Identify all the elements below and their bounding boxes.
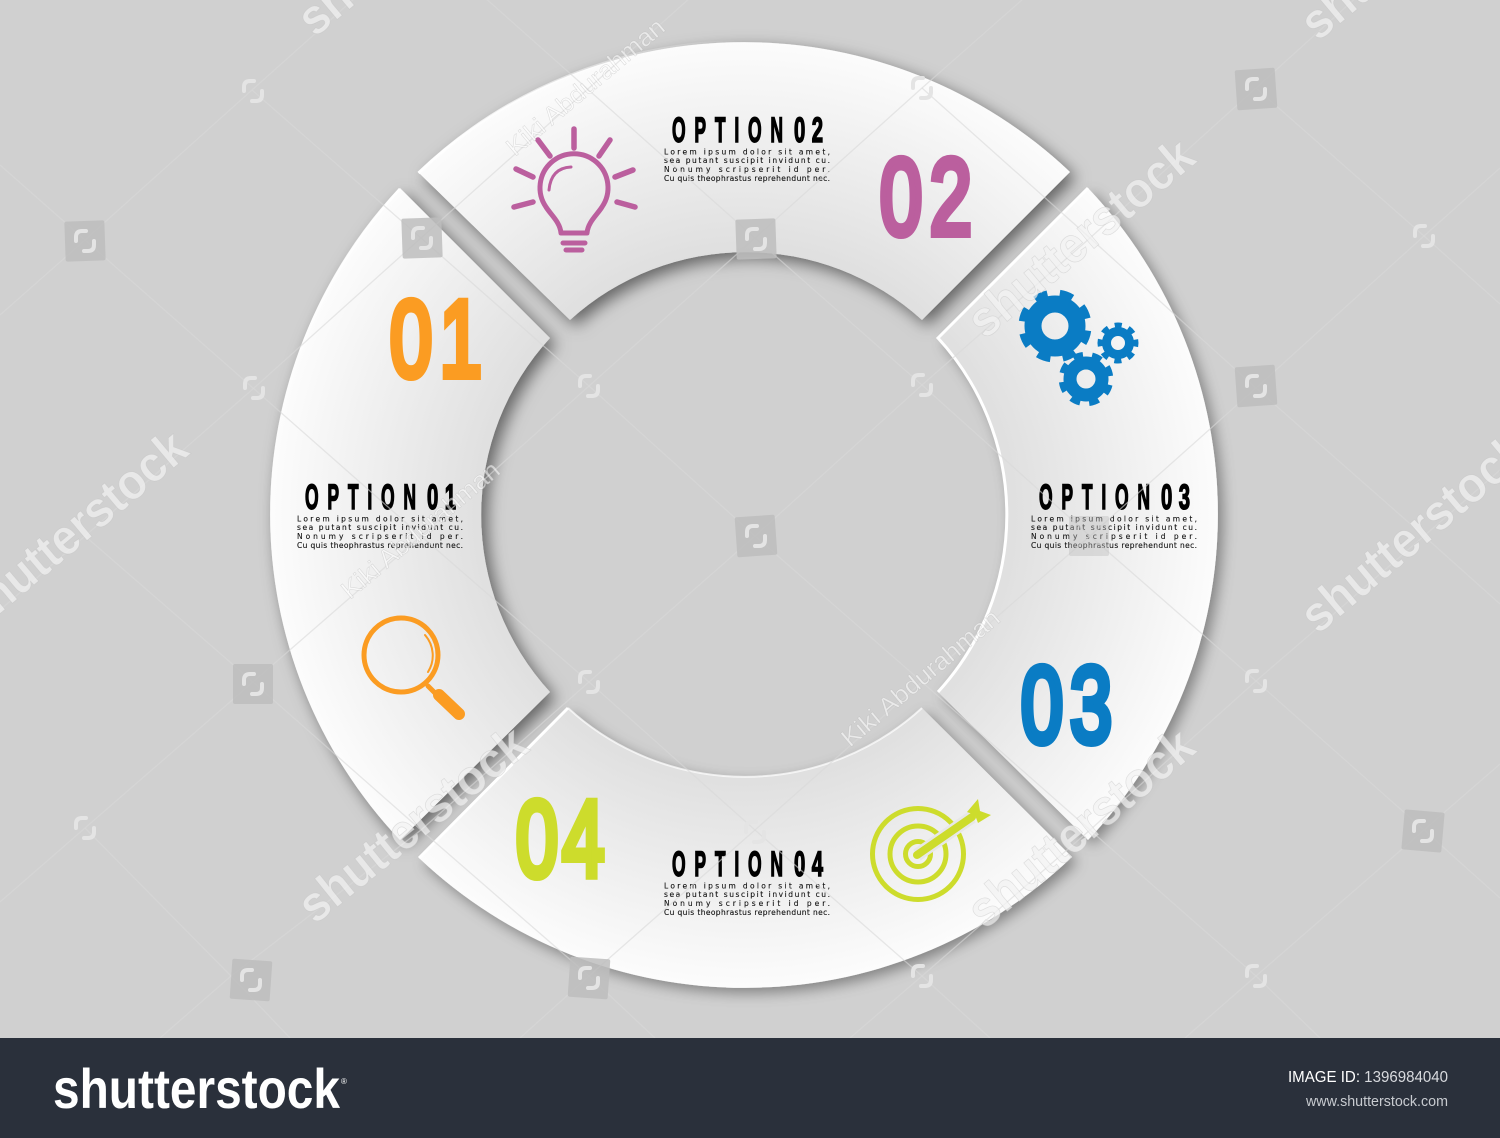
white edge highlights — [272, 42, 1088, 858]
text block: option 03 — [1031, 477, 1197, 550]
text block: option 04: Cu quis theophrastus reprehendunt nec. — [664, 908, 830, 917]
watermark overlay: Kiki Abdurahman — [836, 604, 1006, 753]
text block: option 04: OPTION — [672, 844, 783, 884]
text block: option 01: Nonumy scripserit id per. — [297, 532, 463, 541]
text block: option 01 — [297, 477, 463, 550]
text block: option 03: 03 — [1161, 478, 1190, 518]
text block: option 03: Cu quis theophrastus reprehendunt nec. — [1031, 541, 1197, 550]
footer bar — [0, 1038, 1500, 1138]
number 01: 01 — [390, 279, 482, 399]
watermark overlay: Kiki Abdurahman — [501, 13, 671, 162]
watermark overlay: shutterstock — [287, 715, 538, 934]
footer logo: shutterstock — [53, 1057, 341, 1120]
text block: option 04: Lorem ipsum dolor sit amet, — [664, 882, 830, 890]
segment: option 04 bottom — [419, 708, 1072, 988]
text block: option 02: Nonumy scripserit id per. — [664, 165, 830, 174]
watermark overlay: shutterstock — [956, 127, 1205, 348]
icon: magnifying glass — [364, 618, 459, 714]
number 02: 02 — [880, 137, 972, 257]
text block: option 04 — [664, 844, 830, 917]
text block: option 02: 02 — [794, 111, 823, 151]
text block: option 02: Lorem ipsum dolor sit amet, — [664, 148, 830, 156]
text block: option 04: sea putant suscipit invidunt cu. — [664, 890, 830, 899]
segment: option 01 left — [270, 188, 550, 840]
icon: target with arrow — [872, 799, 991, 900]
text block: option 03: Nonumy scripserit id per. — [1031, 532, 1197, 541]
text block: option 02 — [664, 110, 830, 183]
text block: option 01: Cu quis theophrastus reprehendunt nec. — [297, 541, 463, 550]
image id: IMAGE ID: 1396984040 — [1288, 1069, 1448, 1086]
number 04: 04 — [516, 779, 604, 899]
text block: option 01: OPTION — [305, 477, 416, 517]
text block: option 03: OPTION — [1039, 477, 1150, 517]
text block: option 02: sea putant suscipit invidunt cu. — [664, 156, 830, 165]
text block: option 02: Cu quis theophrastus reprehendunt nec. — [664, 174, 830, 183]
segment: option 02 top — [418, 42, 1070, 320]
watermark overlay: shutterstock — [956, 717, 1205, 938]
number 03: 03 — [1021, 645, 1112, 765]
watermark overlay: Kiki Abdurahman — [336, 456, 506, 605]
text block: option 04: Nonumy scripserit id per. — [664, 899, 830, 908]
segment: option 03 right — [938, 188, 1218, 840]
text block: option 03: Lorem ipsum dolor sit amet, — [1031, 514, 1197, 524]
text block: option 02: OPTION — [672, 110, 783, 150]
text block: option 01: 01 — [427, 478, 456, 518]
text block: option 04: 04 — [794, 845, 823, 885]
icon: gears — [1019, 290, 1139, 408]
site url: www.shutterstock.com — [1305, 1093, 1448, 1110]
icon: light bulb — [514, 129, 635, 250]
text block: option 01: Lorem ipsum dolor sit amet, — [297, 514, 463, 524]
text block: option 03: sea putant suscipit invidunt cu. — [1031, 523, 1197, 532]
registered mark: ® — [341, 1077, 347, 1086]
text block: option 01: sea putant suscipit invidunt cu. — [297, 523, 463, 532]
